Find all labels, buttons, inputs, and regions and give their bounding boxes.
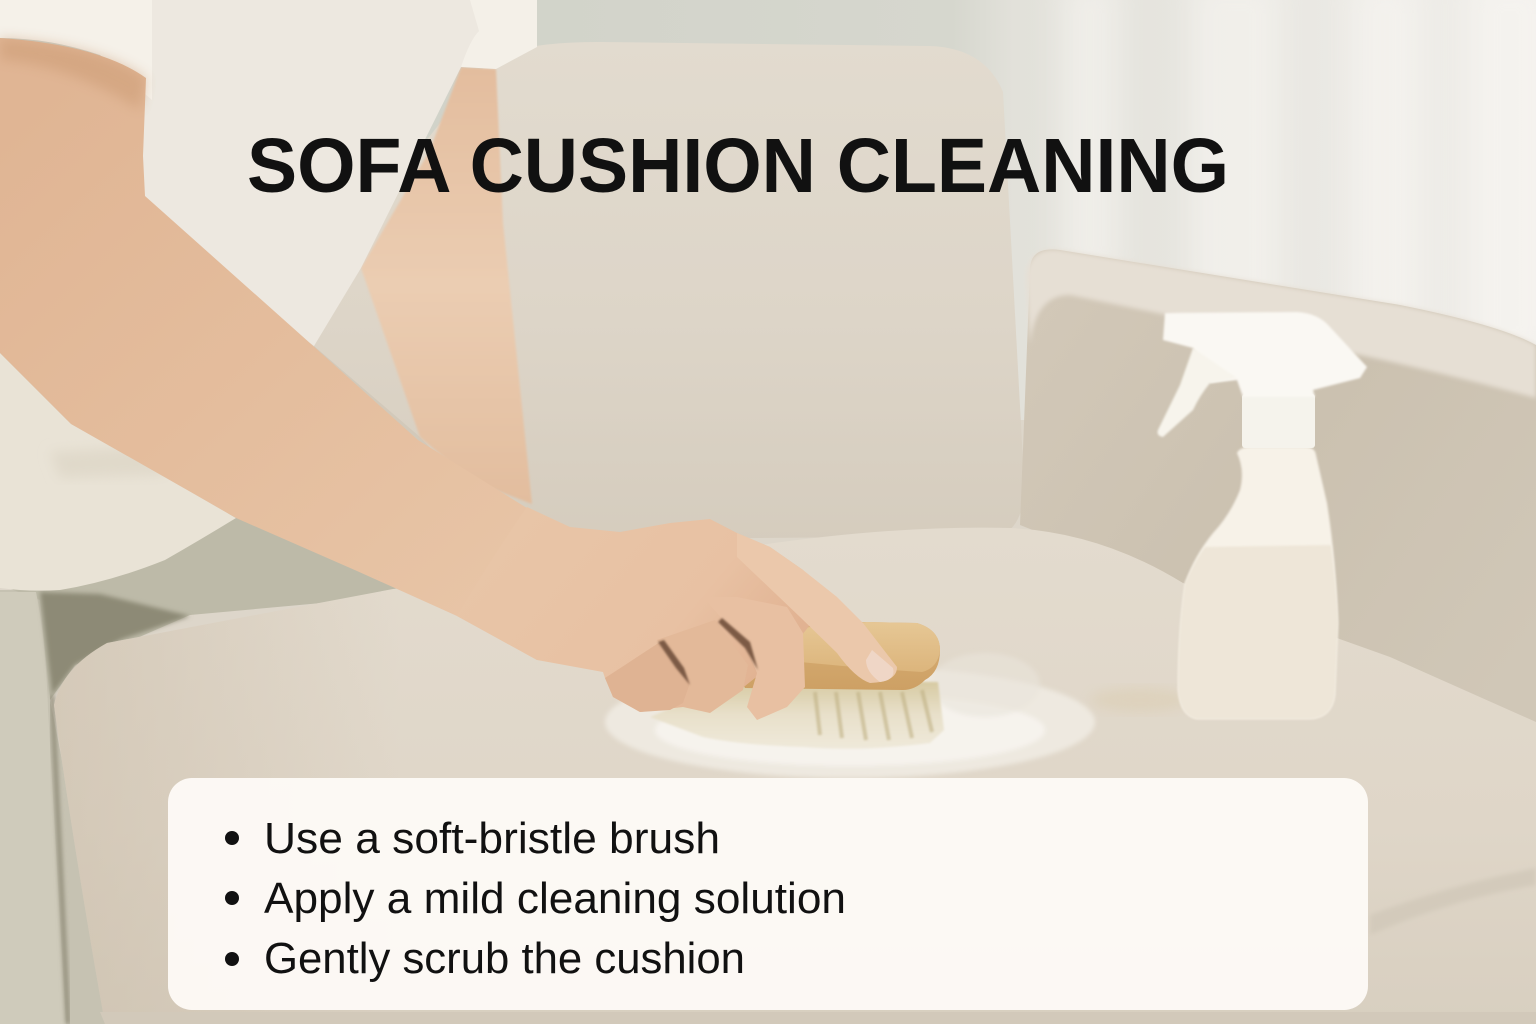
finger gaps [658, 618, 758, 685]
foam on cushion [605, 653, 1095, 778]
background: wall and curtain [0, 0, 1536, 420]
far arm [361, 67, 532, 504]
step 3: Gently scrub the cushion [264, 934, 745, 983]
hand [457, 507, 897, 720]
panel: cleaning steps [168, 778, 1368, 1010]
index finger [737, 533, 897, 683]
ring finger [657, 620, 748, 713]
near arm [0, 38, 537, 660]
step 1: Use a soft-bristle brush [264, 814, 720, 863]
t-shirt [0, 0, 537, 591]
spray bottle [1090, 312, 1367, 719]
middle finger [703, 597, 805, 720]
palm and back of hand [457, 507, 830, 712]
step 2: Apply a mild cleaning solution [264, 874, 846, 923]
brush [650, 622, 944, 749]
sofa side, left [0, 590, 115, 1024]
sofa seat cushion [54, 528, 1536, 1024]
sofa armrest [1020, 249, 1536, 730]
trousers [0, 510, 410, 1024]
little finger [605, 642, 690, 712]
fingernail [866, 650, 893, 682]
sofa backrest [300, 42, 1024, 600]
title: SOFA CUSHION CLEANING [247, 123, 1229, 209]
